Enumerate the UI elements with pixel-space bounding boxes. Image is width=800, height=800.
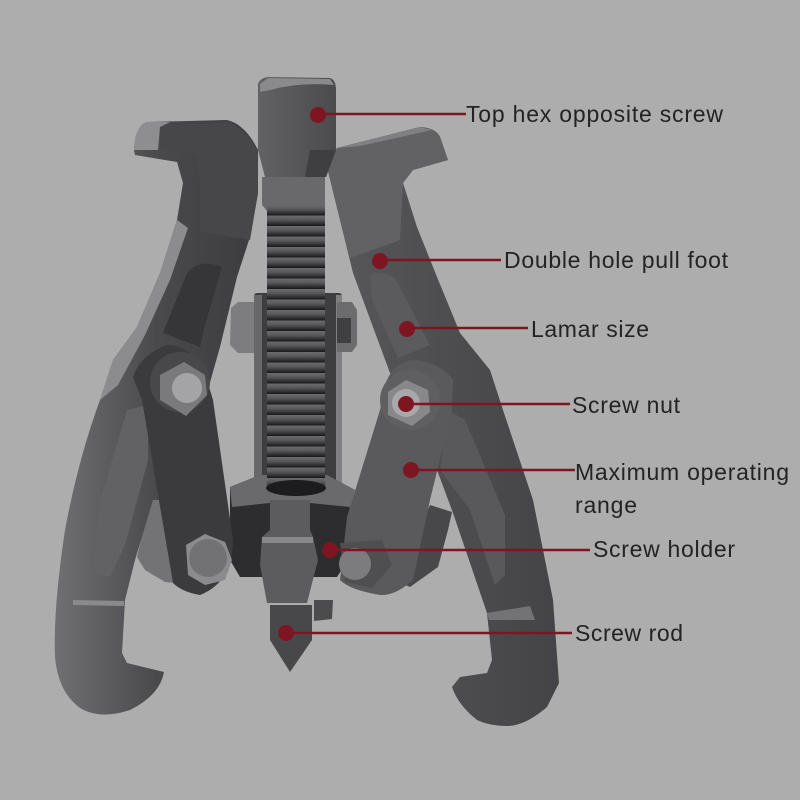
- lower hook ledge: [73, 600, 124, 606]
- right jaw: [327, 127, 559, 726]
- callout: top hex opposite screw: Top hex opposite screw: [466, 101, 723, 127]
- back bracket under the left arm: [137, 500, 195, 585]
- callout: lamar size: Lamar size: [531, 316, 649, 342]
- callout: screw nut: Screw nut: [572, 392, 681, 418]
- right upper bolt: [380, 370, 440, 430]
- lower recess: [440, 410, 505, 585]
- callout: screw holder: [322, 536, 735, 562]
- callout: screw holder: Screw holder: [593, 536, 735, 562]
- left jaw: [55, 120, 258, 715]
- right lower bolt: [339, 540, 392, 588]
- side nuts of the back plate: [230, 302, 357, 353]
- callout: double hole pull foot: Double hole pull foot: [504, 247, 729, 273]
- callout: screw rod: [278, 620, 683, 646]
- lower recess: [92, 405, 148, 577]
- callout: maximum operating range: range: [575, 492, 637, 518]
- back bracket under the right arm: [395, 505, 452, 587]
- top hook face: [160, 122, 258, 240]
- center screw holder block: [260, 500, 318, 672]
- screw thread: [266, 205, 326, 496]
- callout: maximum operating range: [403, 459, 789, 518]
- callout: screw nut: [398, 392, 681, 418]
- left lower bolt: [186, 534, 232, 585]
- upper jaw block: [327, 127, 448, 258]
- callout: lamar size: [399, 316, 649, 342]
- hook light tip: [134, 122, 170, 150]
- light edge of the arm: [100, 220, 188, 400]
- callout: double hole pull foot: [372, 247, 729, 273]
- hex head screw shank: [258, 77, 336, 212]
- lower hook ledge: [487, 606, 535, 620]
- tool: gear puller: [55, 77, 559, 726]
- back plate of the screw: [254, 293, 342, 488]
- left upper bolt: [150, 352, 210, 416]
- center holder bracket: [230, 475, 355, 621]
- callout: top hex opposite screw: [310, 101, 723, 127]
- size recess with stamped mark: [163, 264, 222, 347]
- elongated hole recess: [370, 272, 430, 358]
- callout: maximum operating range: Maximum operating: [575, 459, 789, 485]
- right link plate: [340, 360, 453, 595]
- hook top light edge: [337, 127, 432, 148]
- conical screw tip: [270, 605, 312, 672]
- callout: screw rod: Screw rod: [575, 620, 683, 646]
- left link plate: [133, 345, 233, 595]
